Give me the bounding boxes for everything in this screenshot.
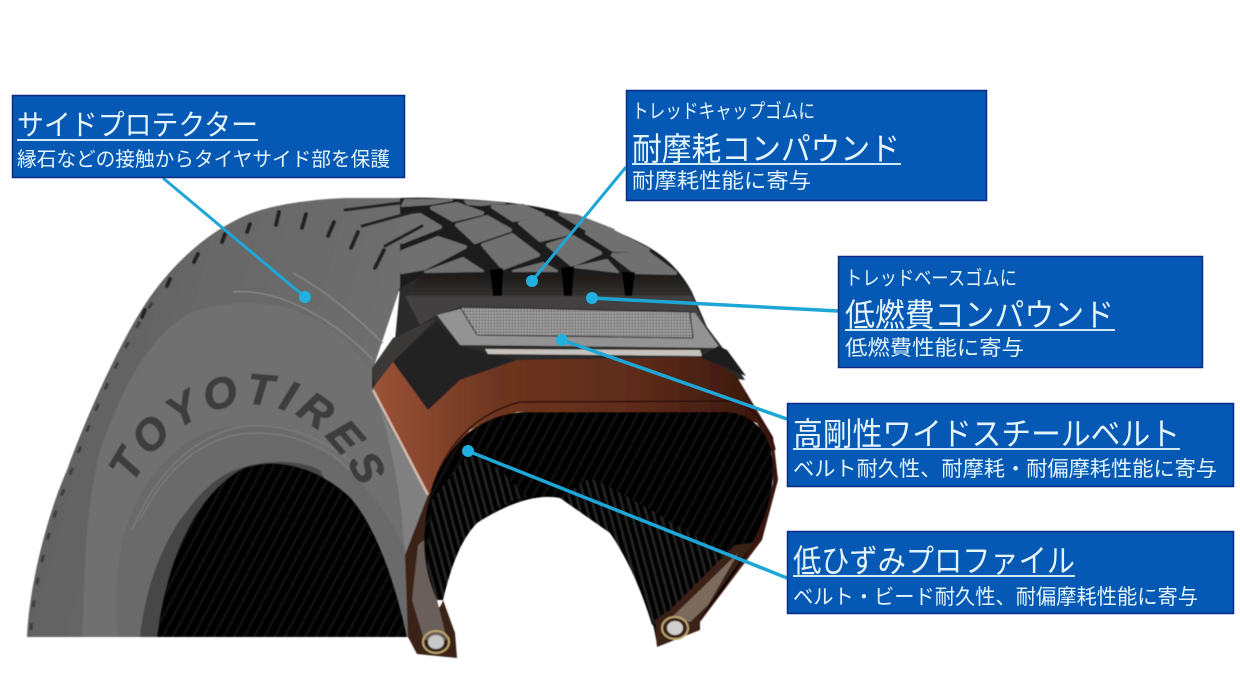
leader line: tread cap <box>526 167 626 287</box>
narrow belt strip <box>485 349 702 356</box>
tread grooves <box>490 266 635 296</box>
cross-section dark rubber <box>372 275 745 410</box>
upper steel belt mesh <box>460 307 693 338</box>
description: fuel economy: 低燃費性能に寄与 <box>845 337 1024 360</box>
inner cavity <box>412 412 773 645</box>
left sidewall cut <box>405 490 457 658</box>
heading: wear resistant compound: 耐摩耗コンパウンド <box>632 131 900 167</box>
carcass highlight line <box>373 390 428 495</box>
panel: tread base rubber <box>838 256 1202 368</box>
lower steel belt <box>437 309 720 348</box>
right tread base <box>700 346 746 376</box>
leader line: steel belt <box>556 334 787 419</box>
lower sidewall shadow <box>140 462 407 637</box>
shoulder ribs <box>142 212 412 317</box>
panel: wide steel belt <box>788 404 1234 486</box>
carcass layer lines <box>433 401 775 485</box>
carcass brown <box>373 357 778 622</box>
kicker: tread cap: トレッドキャップゴムに <box>632 100 815 123</box>
panel: low strain profile <box>788 532 1234 614</box>
right sidewall core <box>672 553 738 622</box>
tire illustration <box>26 196 779 659</box>
tread base band <box>405 296 705 327</box>
tread blocks <box>402 200 675 273</box>
leader line: tread base <box>586 292 838 311</box>
sidewall ring lines <box>132 273 383 530</box>
brand lettering <box>133 404 358 484</box>
cavity ribs lower right <box>560 478 738 625</box>
description: side protector: 縁石などの接触からタイヤサイド部を保護 <box>17 148 390 171</box>
left bead <box>423 631 449 653</box>
description: belt and bead durability: ベルト・ビード耐久性、耐偏摩耗性能に寄与 <box>793 586 1198 609</box>
tire illustration: TOYOTIRES <box>108 373 384 483</box>
kicker: tread base: トレッドベースゴムに <box>845 267 1017 290</box>
cavity ribs left <box>425 452 527 600</box>
heading: wide steel belt: 高剛性ワイドスチールベルト <box>793 416 1180 452</box>
leader line: low strain profile <box>462 445 787 578</box>
heading: side protector: サイドプロテクター <box>17 110 258 142</box>
left shoulder tread grooves <box>345 203 422 246</box>
outer edge serration <box>31 300 154 630</box>
left sidewall core <box>412 540 447 640</box>
sidewall inner panel <box>82 303 428 637</box>
right sidewall cut <box>655 543 753 647</box>
sidewall <box>27 198 428 637</box>
tread cap rubber <box>408 275 692 296</box>
heading: low strain profile: 低ひずみプロファイル <box>793 543 1075 579</box>
right bead <box>662 617 688 639</box>
sidewall light band near cut <box>380 410 428 555</box>
panel: tread cap rubber <box>626 90 986 200</box>
wheel opening dark interior <box>157 463 407 637</box>
bead area ring <box>117 426 410 637</box>
heading: low fuel compound: 低燃費コンパウンド <box>845 297 1114 333</box>
leader line: side protector <box>163 178 311 303</box>
description: wear resistance: 耐摩耗性能に寄与 <box>632 170 811 193</box>
tread top base <box>400 198 692 292</box>
description: belt durability: ベルト耐久性、耐摩耗・耐偏摩耗性能に寄与 <box>793 458 1217 481</box>
lower left tread base block <box>393 322 517 410</box>
panel: side protector <box>12 96 404 178</box>
